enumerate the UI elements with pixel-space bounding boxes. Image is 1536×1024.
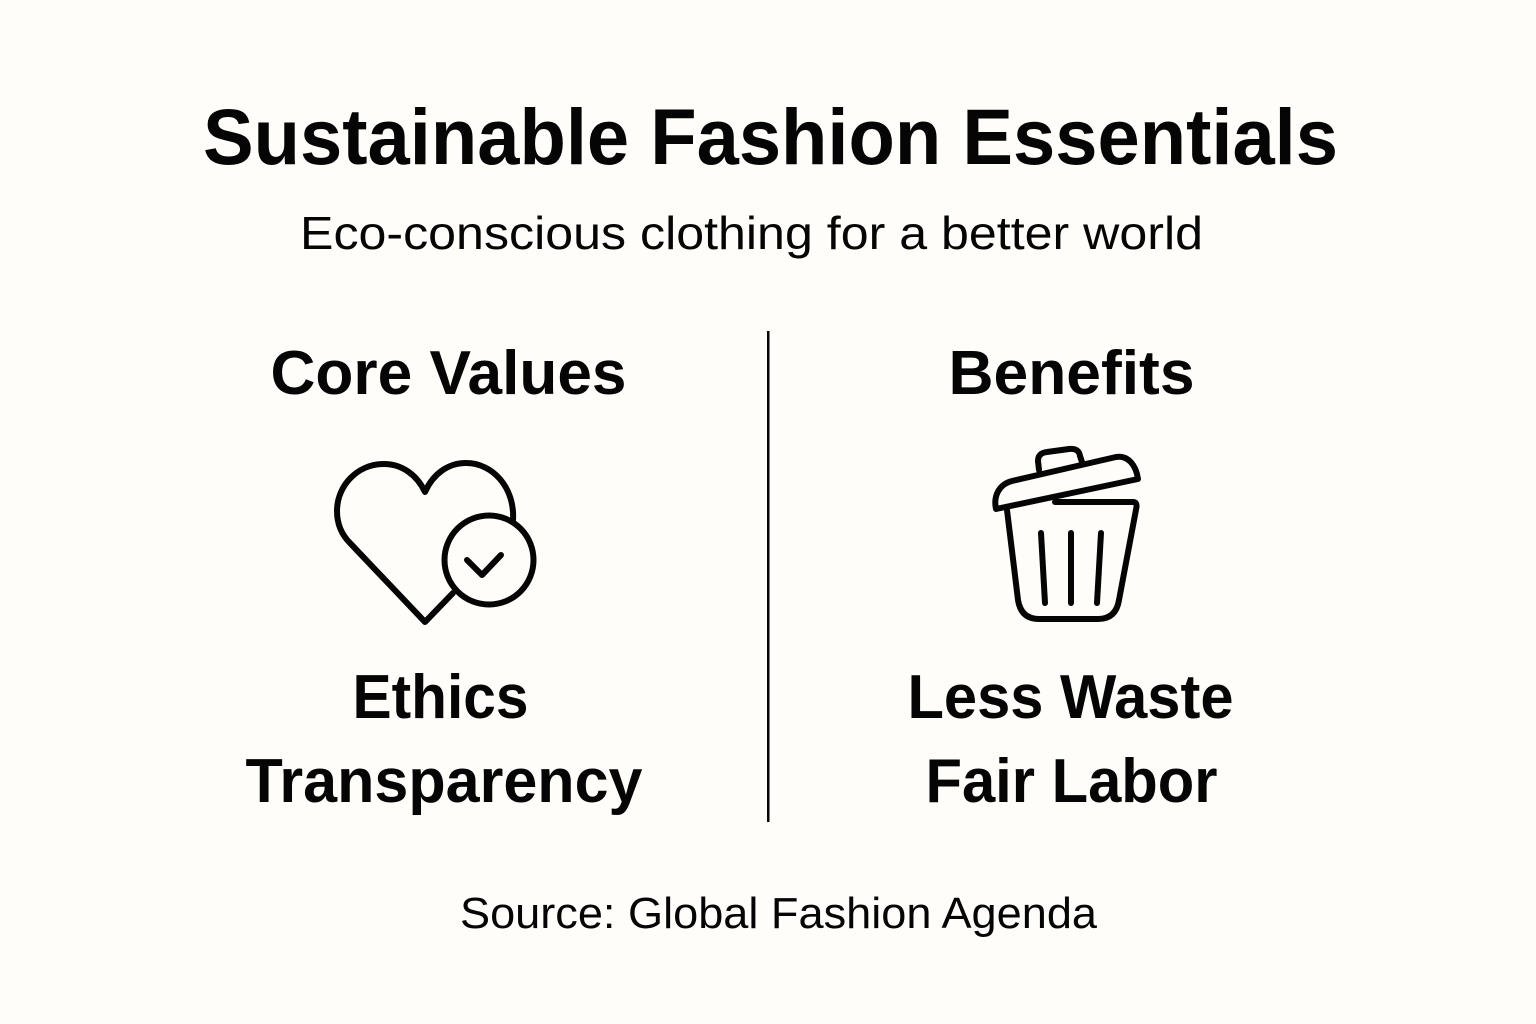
heading: benefits: Benefits: [948, 339, 1194, 408]
heading: core values: Core Values: [270, 339, 626, 408]
list: core values: [246, 663, 643, 816]
panel: benefits: [908, 339, 1234, 816]
title: Sustainable Fashion Essentials: [203, 92, 1338, 181]
icon: heart with check badge: [337, 463, 534, 622]
list: benefits: Fair Labor: [926, 747, 1218, 816]
list: benefits: [908, 663, 1234, 816]
list: core values: Ethics: [352, 663, 528, 732]
list: core values: Transparency: [246, 747, 643, 816]
source note: Source: Global Fashion Agenda: [460, 889, 1098, 938]
list: benefits: Less Waste: [908, 663, 1234, 732]
icon: trash bin with open lid: [995, 449, 1138, 619]
panel: core values: [246, 339, 643, 816]
divider: [767, 331, 770, 822]
subtitle: Eco-conscious clothing for a better world: [300, 207, 1203, 259]
